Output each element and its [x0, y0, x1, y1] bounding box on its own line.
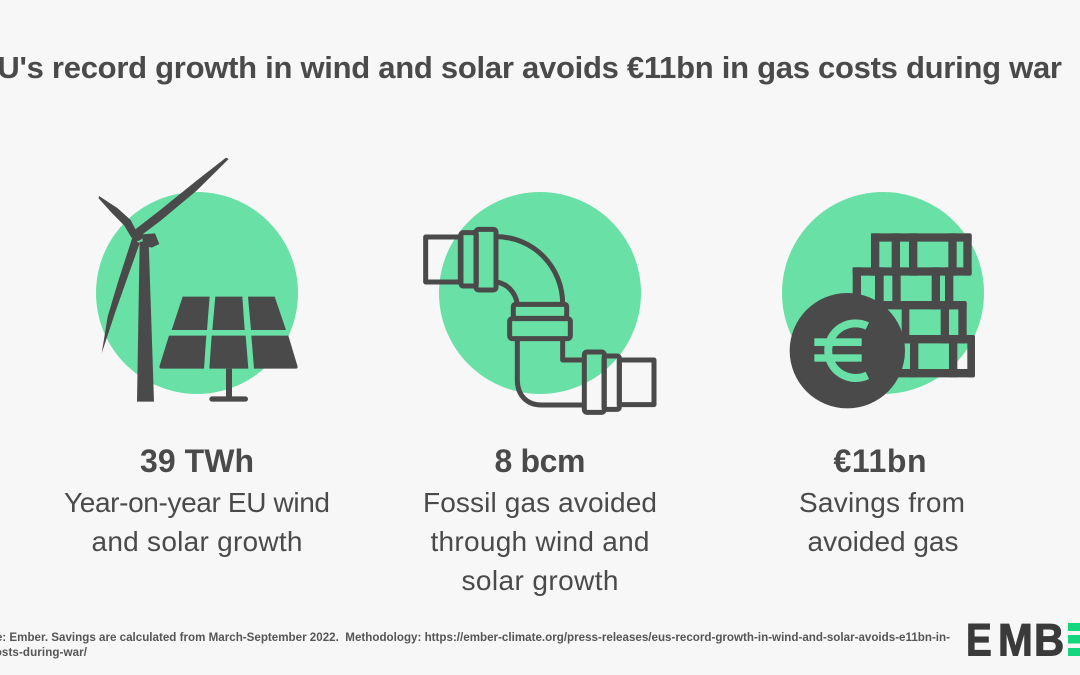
logo: Ember	[966, 615, 1080, 666]
description: wind and solar growth	[64, 487, 330, 557]
description: fossil gas avoided: through wind and	[430, 526, 650, 557]
logo: Ember: E	[966, 615, 992, 665]
description: wind and solar growth: and solar growth	[92, 526, 302, 557]
panel: fossil gas avoided	[423, 192, 657, 596]
logo: Ember: B	[1034, 616, 1064, 666]
icon: wind turbine	[99, 158, 229, 402]
panel: savings	[782, 192, 984, 557]
icon: stack of coins	[790, 233, 975, 408]
stat: 39 TWh: 39 TWh	[140, 443, 254, 479]
description: fossil gas avoided	[423, 487, 657, 596]
stat: 8 bcm: 8 bcm	[494, 443, 586, 479]
icon: euro coin	[790, 293, 905, 408]
green circle: fossil gas	[439, 192, 641, 394]
source note	[0, 631, 950, 659]
green circle: savings	[782, 192, 984, 394]
green circle: wind and solar	[96, 192, 298, 394]
icon: gas pipe	[426, 229, 654, 412]
title: EU's record growth in wind and solar avoids €11bn in gas costs during war	[0, 50, 1062, 85]
description: fossil gas avoided: Fossil gas avoided	[423, 487, 657, 518]
stat: €11bn: €11bn	[834, 443, 926, 479]
description: savings	[799, 487, 965, 557]
description: wind and solar growth: Year-on-year EU wind	[64, 487, 330, 518]
logo: Ember: M	[998, 616, 1033, 666]
description: savings: avoided gas	[808, 526, 958, 557]
description: savings: Savings from	[799, 487, 965, 518]
icon: solar panel	[159, 297, 298, 402]
description: fossil gas avoided: solar growth	[462, 565, 618, 596]
panel: wind and solar	[64, 158, 330, 557]
